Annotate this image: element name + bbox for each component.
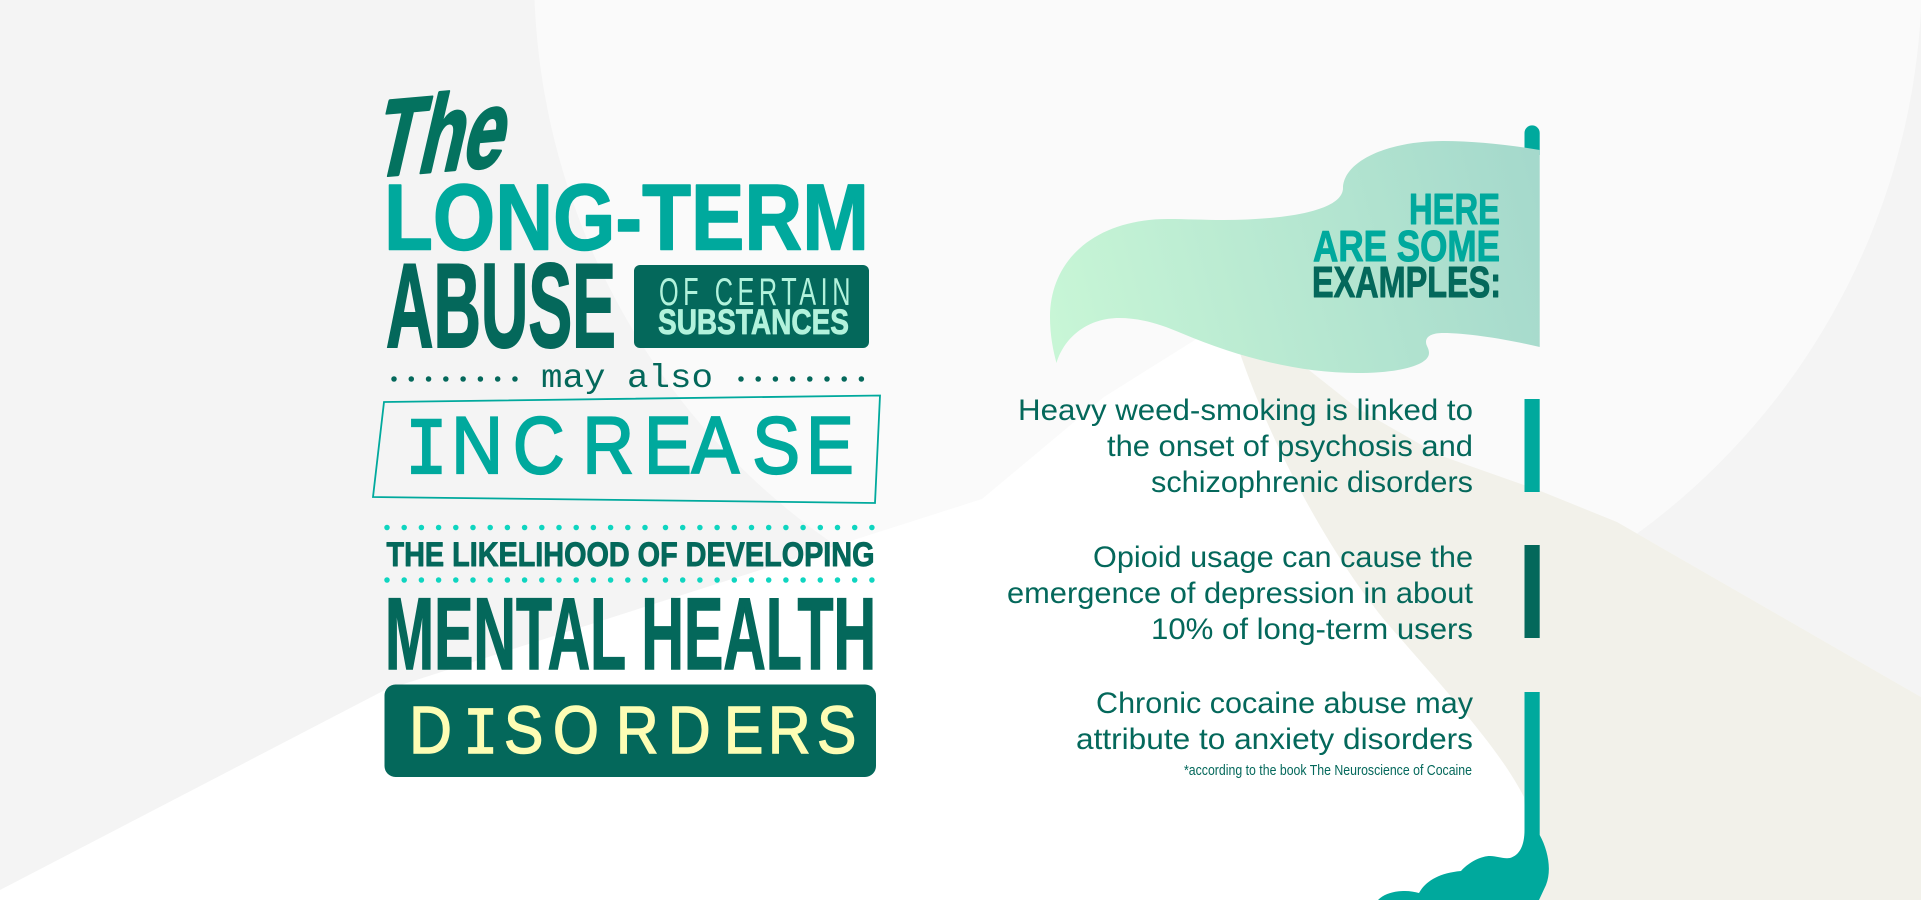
may also with dot leaders: may also: [541, 360, 713, 397]
badge: of certain substances: [634, 265, 869, 348]
footnote: *according to the book The Neuroscience of Cocaine: [1184, 763, 1472, 779]
flag heading: here are some examples: ARE SOME: [1313, 222, 1500, 271]
flag heading: here are some examples: HERE: [1409, 185, 1500, 234]
badge: disorders: DISORDERS: [409, 694, 856, 773]
pole top: [1524, 125, 1540, 155]
flag heading: here are some examples: EXAMPLES:: [1312, 258, 1501, 307]
left title block: [365, 67, 880, 777]
example: opioid: 10% of long-term users: [1151, 613, 1473, 646]
pole base with ground: [1378, 692, 1549, 900]
example: opioid: Opioid usage can cause the: [1093, 541, 1473, 574]
example: opioid: [1007, 541, 1474, 646]
increase outlined box: INCREASE: [405, 401, 854, 497]
badge: of certain substances: SUBSTANCES: [658, 303, 849, 342]
example: opioid: emergence of depression in about: [1007, 577, 1474, 610]
title word: The: The: [365, 67, 523, 201]
example: weed: Heavy weed-smoking is linked to: [1018, 394, 1473, 427]
example: cocaine: attribute to anxiety disorders: [1076, 723, 1473, 756]
title: ABUSE: ABUSE: [386, 239, 616, 373]
flag banner: [1050, 141, 1540, 373]
title: LONG-TERM: LONG-TERM: [384, 164, 869, 270]
title: MENTAL HEALTH: MENTAL HEALTH: [385, 577, 876, 691]
example: cocaine: [1076, 687, 1473, 756]
example: cocaine: Chronic cocaine abuse may: [1096, 687, 1473, 720]
the likelihood of developing with dotted rules: THE LIKELIHOOD OF DEVELOPING: [386, 536, 874, 574]
example: weed: schizophrenic disorders: [1151, 466, 1473, 499]
flag pole and examples: [1007, 125, 1549, 900]
badge: of certain substances: OF CERTAIN: [659, 271, 855, 314]
pole segment 1: [1524, 399, 1540, 492]
example: weed: the onset of psychosis and: [1107, 430, 1473, 463]
pole segment 2: [1524, 545, 1540, 638]
flag heading: here are some examples: [1312, 185, 1501, 307]
example: weed: [1018, 394, 1473, 499]
